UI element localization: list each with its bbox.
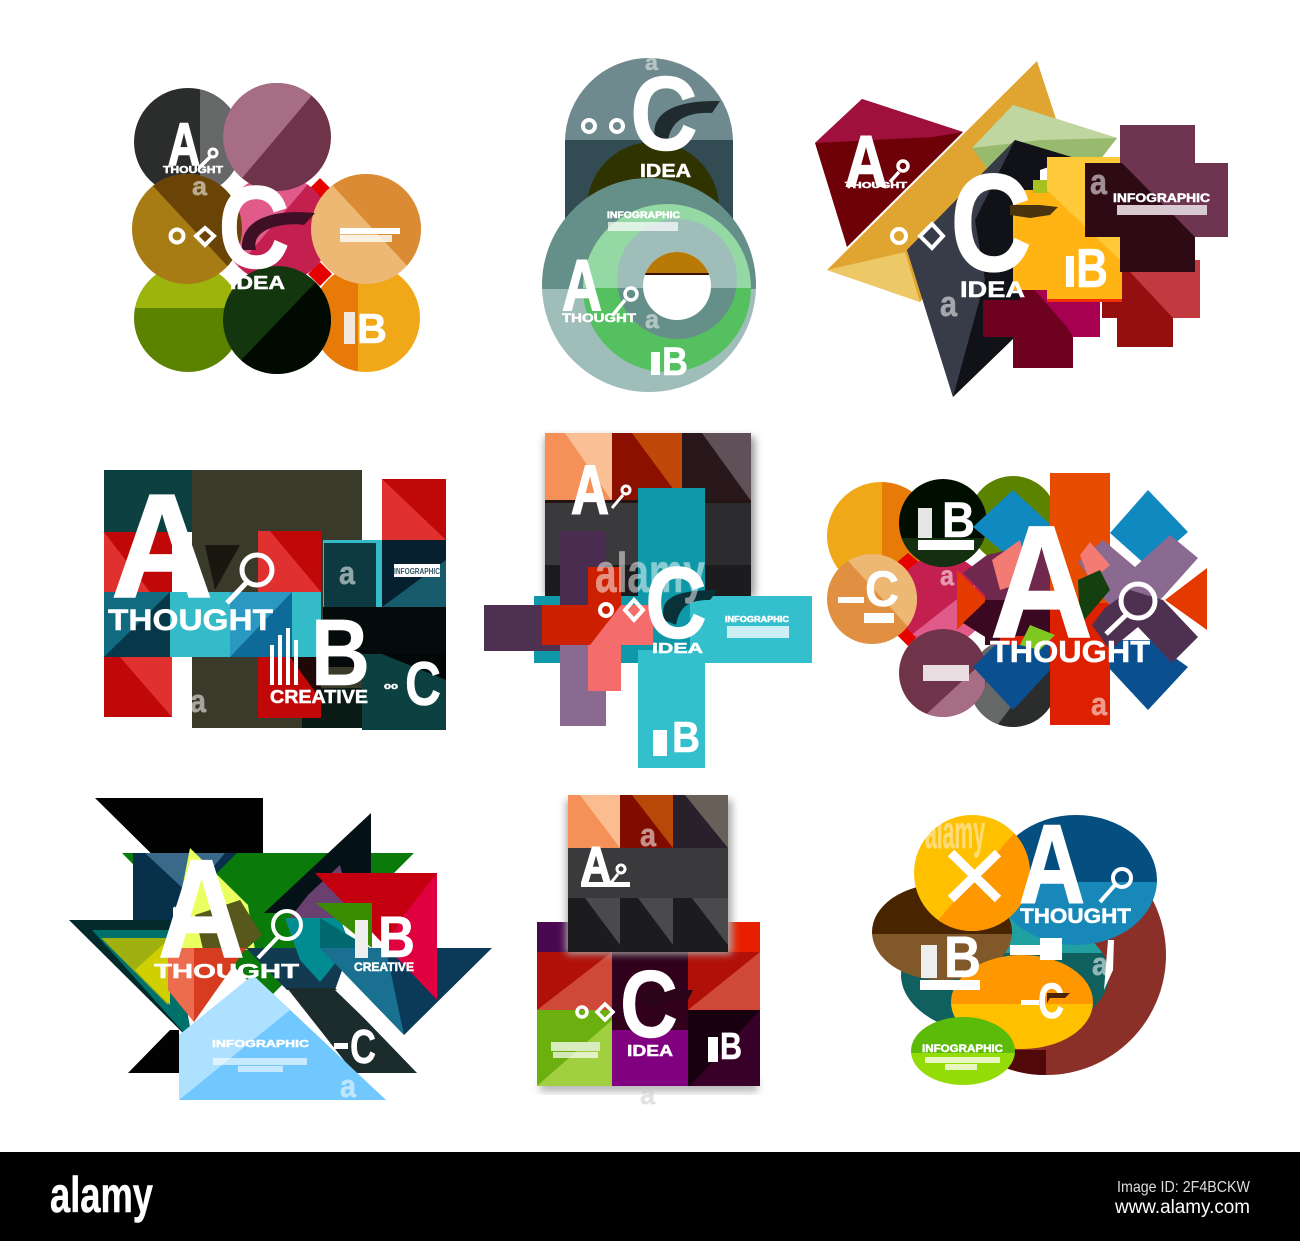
watermark a: a — [339, 555, 355, 591]
white sliver — [1104, 940, 1114, 990]
red connector diamonds — [308, 178, 332, 286]
watermark a — [190, 555, 355, 719]
heading: B: B — [942, 492, 975, 548]
circle: orange — [950, 950, 1095, 1050]
swoosh — [1010, 205, 1058, 218]
dark triangle — [907, 140, 1075, 397]
teal squares — [285, 918, 370, 982]
teal tile — [323, 540, 382, 607]
panel: triangles — [69, 798, 492, 1104]
watermark a — [940, 560, 1107, 722]
heading: A thought: THOUGHT — [562, 311, 637, 325]
heading: B — [918, 492, 975, 550]
heading: C — [1021, 973, 1064, 1029]
diamonds — [896, 553, 920, 646]
dark right triangle — [320, 948, 492, 1035]
red cross — [542, 567, 653, 691]
logo: alamy: alamy — [50, 1167, 153, 1223]
heading: C: C — [405, 650, 441, 719]
text block: infographic: INFOGRAPHIC — [725, 615, 789, 624]
panel: bubbles: alamy — [925, 806, 985, 858]
heading: A thought: THOUGHT — [990, 634, 1150, 669]
heading: B creative: B — [311, 600, 370, 706]
heading: A thought: A — [111, 464, 213, 629]
heading: B: B — [672, 713, 700, 762]
text block: infographic: INFOGRAPHIC — [1113, 191, 1210, 205]
purple — [290, 865, 354, 918]
panel: bubbles — [870, 802, 1171, 1088]
icon: cross — [951, 853, 998, 899]
black lower block — [302, 688, 362, 728]
heading: B — [354, 905, 415, 974]
circle: pink centre — [232, 183, 321, 274]
heading: B — [920, 925, 981, 990]
circle: dark grey — [134, 88, 234, 186]
heading: A thought: A — [990, 492, 1093, 671]
watermark a: a — [190, 683, 206, 719]
yellow square — [1013, 157, 1122, 302]
dark teal triangle — [69, 920, 193, 1043]
heading: C — [384, 650, 441, 719]
shadow upper — [566, 800, 732, 954]
circle: green — [911, 1017, 1015, 1085]
text block: infographic — [212, 1039, 309, 1072]
heading: A thought: A — [571, 451, 609, 529]
text block: infographic — [725, 615, 789, 638]
purple band shapes — [963, 535, 1198, 663]
gold triangle — [827, 61, 1058, 302]
panel: triangles and crosses — [815, 61, 1228, 397]
circle: brown — [872, 888, 1012, 980]
blue diamonds — [973, 490, 1188, 710]
heading: B: B — [357, 305, 387, 352]
icon: bars — [270, 628, 298, 685]
circle: dark green — [223, 266, 331, 374]
circle: yellow — [914, 815, 1030, 931]
panel: square grid with teal bands — [104, 464, 446, 730]
text block — [923, 665, 969, 681]
swoosh — [663, 590, 718, 625]
text block: infographic: INFOGRAPHIC — [394, 567, 440, 576]
heading: B: B — [662, 340, 688, 384]
teal circle — [901, 917, 1109, 1022]
watermark a: a — [645, 50, 659, 75]
inner ring — [617, 219, 737, 339]
heading: A thought: THOUGHT — [108, 604, 273, 637]
watermark a: a — [1091, 686, 1107, 722]
shadow — [545, 437, 755, 597]
top block — [568, 795, 728, 952]
circle: pink — [906, 560, 986, 638]
heading: B: B — [720, 1026, 742, 1068]
heading: A thought: A — [168, 111, 200, 178]
centre disc — [643, 252, 711, 320]
olive block — [192, 470, 362, 728]
heading: A thought: THOUGHT — [163, 165, 223, 176]
red triangle — [315, 873, 437, 1035]
icon: circles — [577, 1004, 613, 1020]
purple cross — [484, 531, 606, 726]
icon: circles — [583, 120, 623, 132]
band — [104, 592, 321, 657]
heading: B — [708, 1026, 742, 1068]
watermark a: a — [1092, 946, 1108, 982]
black triangle — [264, 813, 371, 913]
heading: A thought: A — [845, 122, 887, 202]
watermark a: a — [940, 283, 958, 324]
watermark a: a — [645, 304, 660, 334]
icon: magnifier — [1100, 869, 1131, 902]
icon: circles — [600, 600, 643, 620]
panel: tile grid — [537, 795, 760, 1110]
panel: overlapping circles — [130, 80, 428, 380]
footer bar — [0, 1152, 1300, 1241]
cyan lower bar — [638, 650, 705, 768]
circle: green — [969, 476, 1057, 564]
image id: Image ID: 2F4BCKW — [1117, 1179, 1251, 1196]
top right red tile — [382, 479, 446, 540]
orange bar — [1050, 473, 1110, 725]
green inner triangle — [316, 903, 372, 948]
heading: C idea: C — [645, 546, 707, 660]
heading: B — [653, 713, 700, 762]
grey grid — [545, 433, 751, 597]
heading: C: C — [350, 1021, 376, 1074]
heading: B creative: CREATIVE — [270, 687, 368, 707]
black bottom — [128, 1030, 179, 1073]
panel: circles and diamonds — [825, 473, 1207, 735]
circle: mauve — [899, 629, 986, 717]
circle: yellow — [827, 482, 920, 570]
watermark a — [640, 817, 656, 1110]
watermark alamy: alamy — [595, 541, 705, 604]
text block: infographic — [551, 1042, 600, 1058]
navy block — [133, 853, 237, 940]
heading: A thought — [562, 246, 637, 326]
heading: A thought: A — [158, 830, 245, 987]
heading: B: CREATIVE — [354, 960, 414, 974]
heading: B — [1066, 237, 1108, 299]
icon: magnifier — [227, 555, 272, 603]
heading: C — [334, 1021, 376, 1074]
swoosh — [242, 212, 315, 250]
crescent — [1007, 900, 1166, 1075]
yellow green accent — [195, 900, 262, 958]
lower block — [537, 922, 760, 1086]
teal lower block — [362, 654, 446, 730]
red cross — [1102, 260, 1200, 347]
teal band horizontal — [534, 596, 812, 663]
heading: C idea: C — [950, 144, 1032, 301]
heading: B — [344, 305, 387, 352]
middle red tile — [205, 531, 321, 592]
teal corner — [104, 470, 192, 532]
heading: B creative — [270, 600, 370, 707]
watermark a: a — [340, 1068, 356, 1104]
dark grey triangle — [287, 988, 417, 1073]
website: www.alamy.com — [1114, 1197, 1250, 1218]
heading: B: B — [944, 925, 981, 990]
circle: orange upper right — [310, 172, 425, 287]
black block — [323, 607, 446, 667]
side triangles — [957, 568, 1207, 630]
swoosh — [654, 101, 720, 140]
coral triangle — [168, 948, 246, 1022]
navy fill — [246, 948, 350, 990]
heading: C: C — [1038, 973, 1064, 1029]
heading: C idea: IDEA — [627, 1043, 674, 1060]
green band — [122, 853, 414, 1000]
icon: circles — [170, 228, 214, 245]
lower red tile left — [104, 657, 172, 717]
shadow — [540, 1078, 758, 1092]
circle: black — [895, 478, 990, 568]
stadium shape — [565, 58, 733, 219]
heading: B — [651, 340, 688, 384]
text block: infographic: INFOGRAPHIC — [607, 210, 681, 220]
text block: infographic — [607, 210, 681, 231]
outer ring — [540, 175, 760, 399]
watermark a: a — [640, 1079, 655, 1110]
circle: orange lower right — [320, 274, 420, 372]
heading: A thought: A — [1019, 802, 1085, 927]
heading: C idea: C — [218, 162, 290, 294]
swoosh — [640, 989, 693, 1010]
circle: blue — [1010, 815, 1157, 945]
olive triangle — [101, 938, 170, 1005]
swoosh — [1047, 993, 1070, 1003]
text block: infographic: INFOGRAPHIC — [922, 1043, 1003, 1055]
lower red tile middle — [258, 657, 321, 718]
icon: magnifier — [258, 911, 301, 958]
icon: magnifier — [1106, 584, 1155, 634]
centre fill behind A — [985, 540, 1055, 650]
circle: grey — [974, 645, 1050, 727]
mauve cross — [1085, 125, 1228, 272]
pale green shape — [972, 105, 1117, 172]
heading: C: C — [865, 561, 899, 617]
circle: brown — [130, 172, 245, 287]
heading: C idea: C — [620, 951, 678, 1058]
text block: infographic — [1113, 191, 1210, 215]
heading: C idea: IDEA — [960, 277, 1025, 302]
heading: C — [838, 561, 899, 623]
heading: A thought: THOUGHT — [845, 181, 907, 190]
circle: green — [134, 274, 233, 372]
icon: key — [1010, 938, 1062, 960]
kite dark red — [815, 99, 963, 247]
heading: C idea: IDEA — [640, 161, 691, 181]
watermark a: a — [940, 560, 954, 591]
teal bar vertical — [638, 488, 705, 598]
watermark a: a — [192, 171, 208, 201]
text block: infographic — [340, 228, 400, 242]
circle: mauve — [223, 83, 331, 191]
green ring — [580, 200, 755, 378]
heading: B: B — [378, 905, 415, 970]
heading: A thought: THOUGHT — [1020, 905, 1131, 928]
text block: infographic — [394, 564, 440, 577]
lime highlight — [170, 848, 255, 950]
panel: cross over grey grid — [484, 433, 812, 768]
watermark a — [645, 50, 660, 334]
heading: C idea: IDEA — [230, 273, 285, 293]
heading: C idea: C — [630, 55, 698, 173]
icon: circles — [892, 224, 943, 248]
left red tile — [104, 532, 172, 592]
watermark a: a — [1090, 161, 1108, 202]
black top — [95, 798, 263, 912]
watermark a: a — [640, 817, 656, 853]
panel: stadium and rings — [540, 50, 760, 399]
heading: A thought: A — [581, 837, 611, 893]
watermark a — [940, 161, 1108, 324]
heading: A thought — [108, 464, 273, 637]
heading: A thought: THOUGHT — [154, 961, 299, 983]
heading: B: B — [1076, 237, 1108, 299]
heading: A thought: A — [562, 246, 602, 326]
text block: infographic — [922, 1043, 1003, 1070]
dark tile — [382, 540, 446, 619]
light blue triangle — [179, 975, 386, 1100]
heading: A thought — [154, 830, 299, 987]
text block: infographic: INFOGRAPHIC — [212, 1039, 309, 1050]
heading: C idea: IDEA — [652, 640, 703, 657]
heading: C: oo — [384, 681, 399, 691]
crimson cross — [983, 267, 1100, 368]
circle: tan — [827, 554, 917, 644]
